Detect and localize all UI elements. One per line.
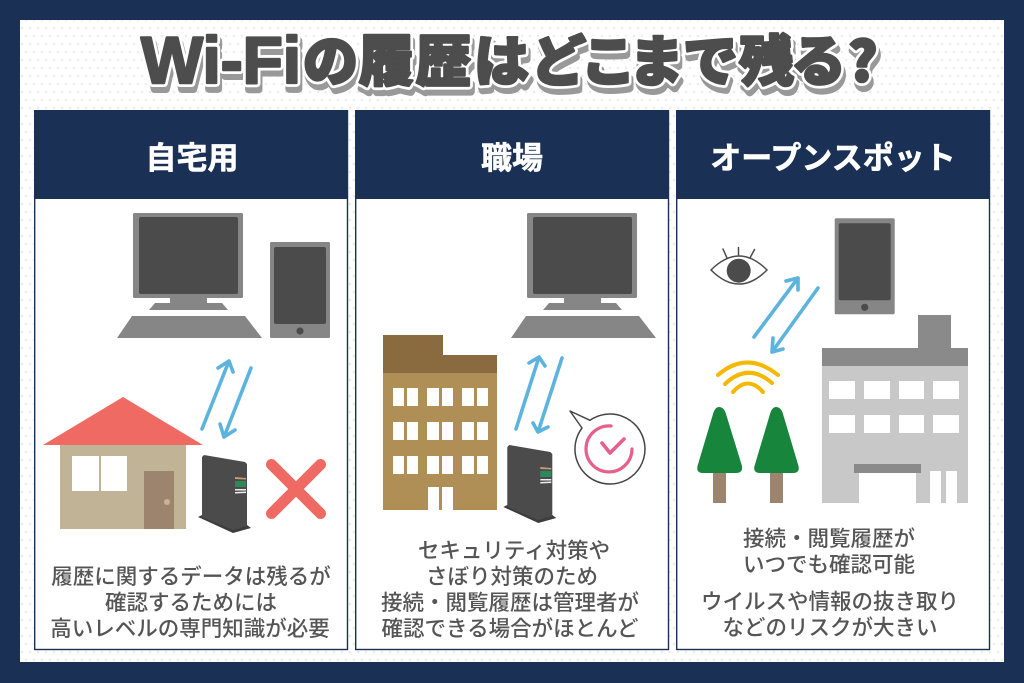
icon: router bbox=[198, 455, 251, 533]
icon: two-way arrows bbox=[516, 357, 562, 432]
text: workplace description: 接続・閲覧履歴は管理者が bbox=[381, 591, 639, 615]
panel header: workplace: 職場 bbox=[481, 141, 543, 176]
icon: house bbox=[43, 397, 203, 529]
text: hotspot description: などのリスクが大きい bbox=[722, 616, 938, 640]
icon: clock speech bubble bbox=[570, 411, 645, 484]
panel header: open hotspot bbox=[676, 110, 990, 199]
title: Wi-Fi bbox=[141, 23, 301, 97]
text: home description: 履歴に関するデータは残るが bbox=[51, 564, 331, 589]
panel header: home bbox=[34, 110, 348, 199]
panel: home bbox=[34, 110, 348, 650]
panel header: workplace bbox=[355, 110, 669, 199]
text: hotspot description: 接続・閲覧履歴が bbox=[743, 527, 915, 551]
text: home description: 高いレベルの専門知識が必要 bbox=[50, 617, 330, 641]
text: hotspot description bbox=[701, 527, 959, 640]
text: home description bbox=[50, 564, 331, 641]
icon: two-way arrows bbox=[754, 278, 818, 352]
text: workplace description: 確認できる場合がほとんど bbox=[382, 617, 638, 641]
icon: desktop computer bbox=[511, 213, 656, 338]
title: の履歴はどこまで残る? bbox=[303, 17, 877, 97]
icon: office building bbox=[383, 335, 497, 510]
panel header: open hotspot: オープンスポット bbox=[710, 141, 956, 176]
text: hotspot description: いつでも確認可能 bbox=[743, 553, 915, 577]
icon: cross mark bbox=[272, 464, 320, 514]
icon: desktop computer bbox=[117, 213, 262, 338]
panel: workplace bbox=[355, 110, 669, 650]
panel: open hotspot bbox=[676, 110, 990, 650]
icon: trees bbox=[697, 407, 799, 503]
text: home description: 確認するためには bbox=[105, 591, 277, 615]
icon: wifi signal bbox=[718, 362, 778, 392]
title: の履歴はどこまで残る? bbox=[305, 23, 879, 103]
text: workplace description: さぼり対策のため bbox=[426, 565, 598, 589]
title: の履歴はどこまで残る? bbox=[303, 17, 877, 97]
icon: router bbox=[503, 445, 556, 523]
icon: eye bbox=[711, 248, 767, 284]
icon: tablet bbox=[835, 218, 895, 314]
text: hotspot description: ウイルスや情報の抜き取り bbox=[701, 590, 959, 614]
icon: grey building bbox=[822, 315, 968, 503]
icon: two-way arrows bbox=[202, 361, 251, 437]
title: Wi-Fi bbox=[141, 23, 301, 97]
text: workplace description: セキュリティ対策や bbox=[418, 539, 610, 563]
icon: tablet bbox=[270, 242, 330, 338]
panel header: home: 自宅用 bbox=[146, 141, 238, 176]
title: Wi-Fi bbox=[143, 29, 303, 103]
text: workplace description bbox=[381, 539, 639, 641]
